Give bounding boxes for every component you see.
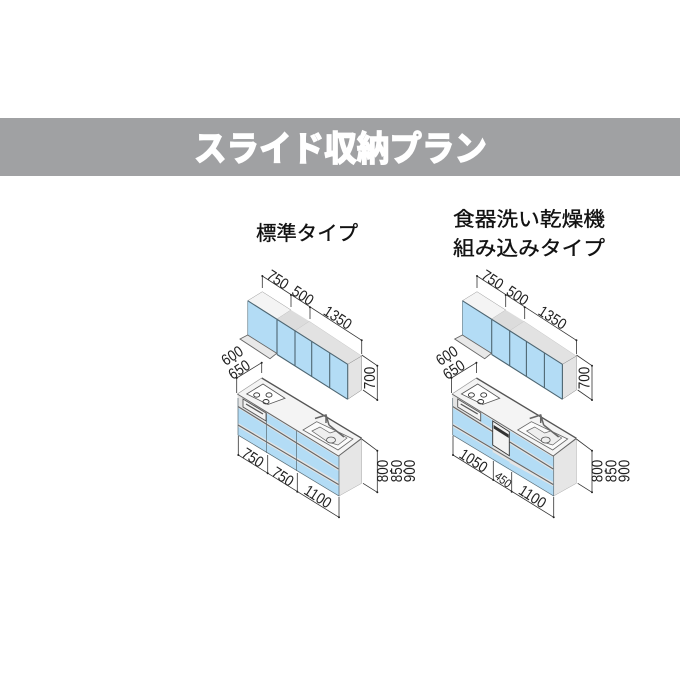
dimension lines — [450, 275, 620, 518]
dimension labels: 800 — [590, 460, 607, 482]
heading: dishwasher built-in type — [453, 208, 605, 260]
heading: dishwasher built-in type: 食器洗い乾燥機 — [453, 208, 605, 231]
dimension labels — [219, 267, 419, 512]
dimension labels: 700 — [362, 367, 379, 389]
sink — [303, 422, 353, 450]
heading: dishwasher built-in type: 組み込みタイプ — [453, 237, 605, 260]
diagram: standard plan — [219, 267, 419, 518]
shelf — [455, 335, 491, 359]
dimension lines — [235, 275, 405, 518]
hob — [461, 384, 500, 404]
dimension labels: 750 — [263, 267, 291, 294]
sink — [518, 422, 568, 450]
dimension labels: 600 — [219, 343, 247, 370]
dimension labels: 1350 — [320, 303, 355, 334]
counter unit — [237, 378, 362, 496]
dimension labels: 750 — [238, 445, 266, 472]
counter unit — [452, 378, 576, 496]
drawer fronts — [266, 413, 338, 467]
wall cabinets — [248, 292, 362, 399]
dimension labels: 600 — [433, 343, 461, 370]
dimension labels: 900 — [617, 460, 634, 482]
shelf — [240, 335, 277, 359]
dimension labels: 850 — [389, 460, 406, 482]
title band — [0, 118, 680, 176]
dimension labels: 500 — [503, 283, 531, 310]
diagram: dishwasher plan — [433, 267, 634, 518]
dimension labels: 700 — [577, 367, 594, 389]
grill — [243, 399, 266, 421]
hob — [247, 384, 285, 404]
grill — [458, 399, 481, 421]
heading: standard type: 標準タイプ — [256, 222, 358, 245]
dimension labels: 850 — [604, 460, 621, 482]
dimension labels: 500 — [288, 283, 316, 310]
dimension labels: 1100 — [301, 482, 334, 512]
dimension labels: 1050 — [456, 446, 490, 477]
dimension labels: 800 — [375, 460, 392, 482]
dimension labels: 900 — [402, 460, 419, 482]
dimension labels: 750 — [268, 464, 296, 491]
dishwasher — [493, 421, 509, 456]
dimension labels: 1100 — [515, 482, 549, 512]
dimension labels: 650 — [226, 357, 254, 384]
dimension labels: 450 — [492, 470, 513, 491]
faucet — [315, 415, 344, 437]
faucet — [530, 415, 559, 437]
dimension labels: 1350 — [535, 303, 569, 334]
wall cabinets — [462, 292, 576, 399]
title: スライド収納プラン — [194, 130, 487, 169]
drawer fronts — [481, 413, 493, 429]
dimension labels: 650 — [440, 357, 468, 384]
dimension labels: 750 — [478, 267, 506, 294]
dimension labels — [433, 267, 634, 512]
